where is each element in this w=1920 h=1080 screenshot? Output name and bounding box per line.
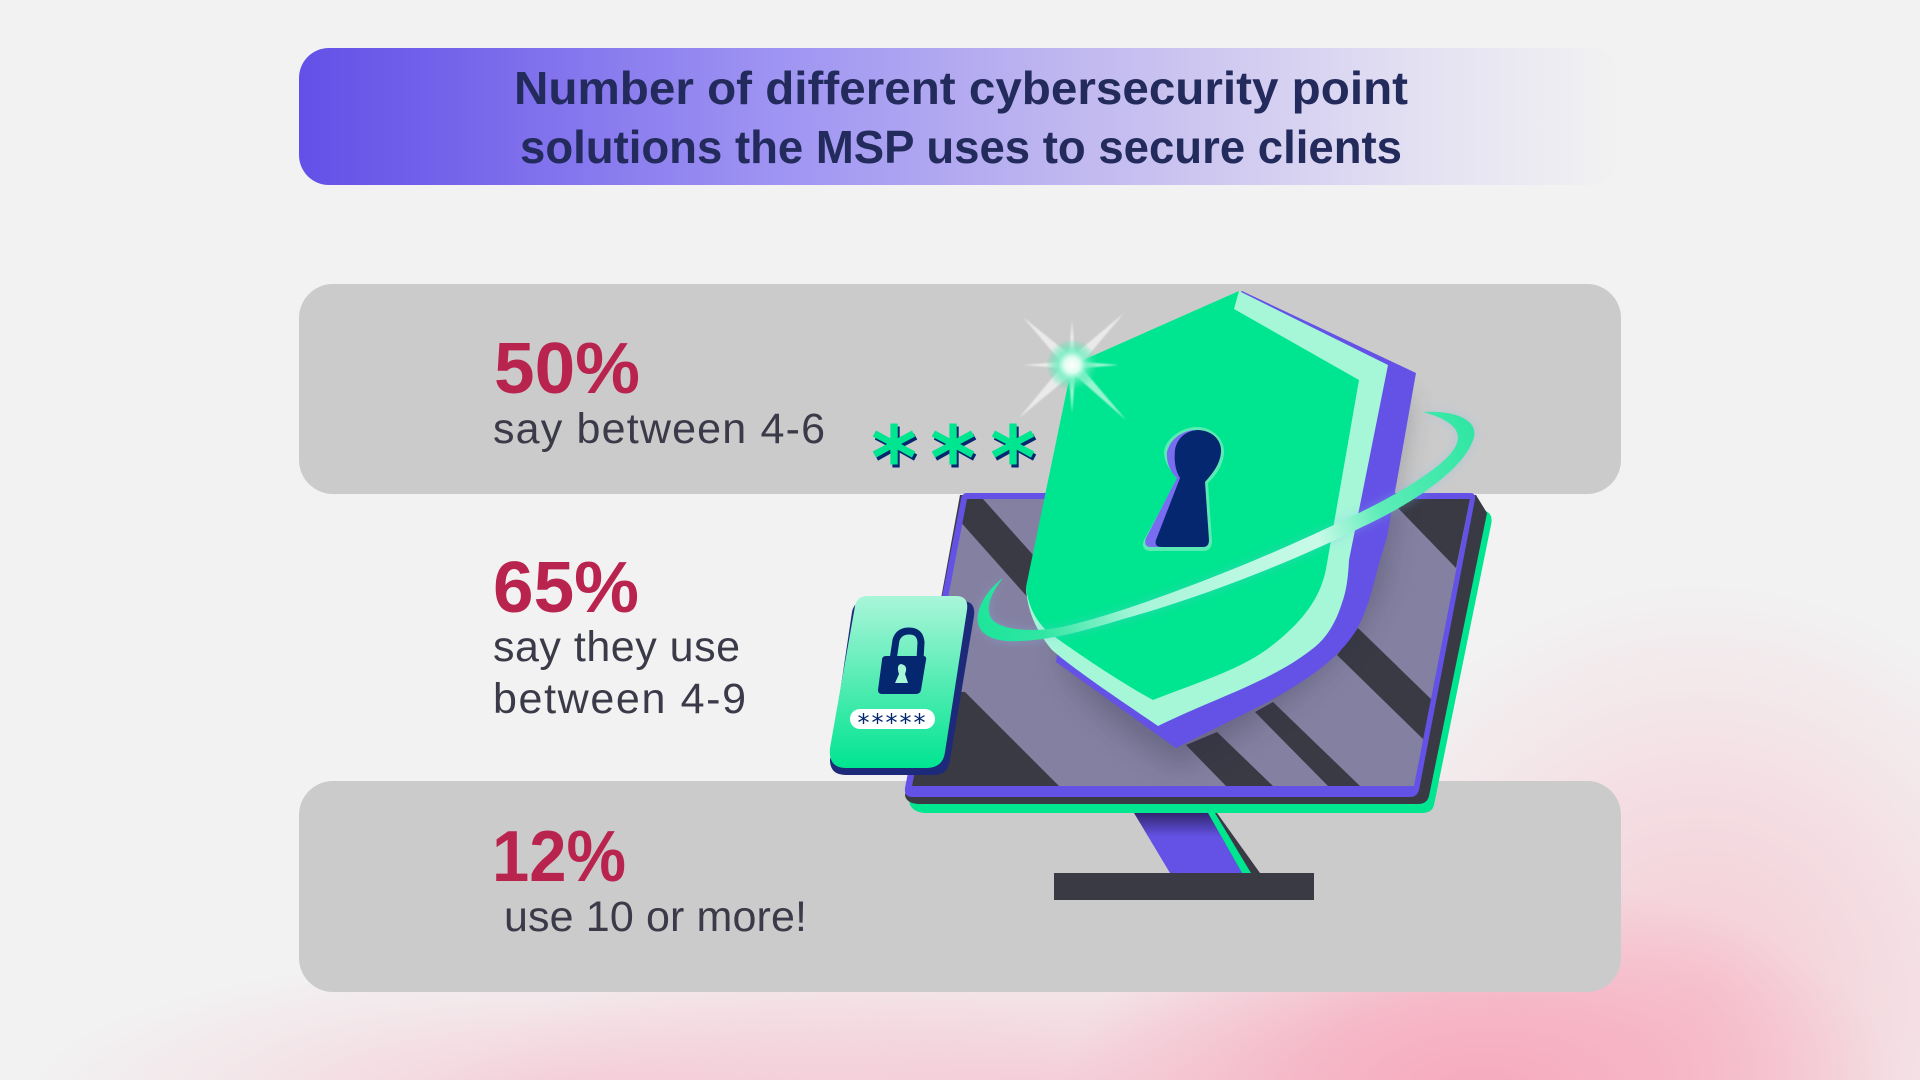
password field: *****: [858, 709, 928, 737]
icon: password asterisks: *: [871, 407, 917, 510]
stat: 65% say they use between 4-9: between 4-9: [493, 675, 746, 723]
stat: 50% say between 4-6: 50%: [494, 329, 640, 409]
panel: bottom grey band: [299, 781, 1621, 992]
infographic canvas: [299, 48, 1621, 992]
shield shadow: [1060, 340, 1410, 768]
icon: sparkle: [1019, 313, 1126, 420]
stat: 65% say they use between 4-9: say they use: [493, 623, 740, 671]
icon: password asterisks: *: [932, 410, 978, 513]
padlock: [878, 631, 926, 694]
stat: 65% say they use between 4-9: 65%: [493, 548, 639, 628]
panel: top grey band: [299, 284, 1621, 494]
monitor screen with diagonal stripes: [905, 499, 1470, 786]
icon: phone with lock: [830, 596, 974, 775]
icon: password asterisks: *: [930, 407, 976, 510]
stat: 50% say between 4-6: [493, 329, 825, 453]
title text: Number of different cybersecurity point: [514, 62, 1408, 114]
icon: password asterisks: *: [992, 410, 1038, 513]
icon: password asterisks: *: [873, 410, 919, 513]
shield green face: [1026, 291, 1359, 700]
monitor stand: [1054, 813, 1314, 900]
stat: 50% say between 4-6: say between 4-6: [493, 405, 825, 453]
icon: monitor: [905, 493, 1492, 900]
shield purple side: [1056, 291, 1416, 748]
icon: shield: [1026, 291, 1416, 748]
shield light rim: [1026, 291, 1388, 726]
icon: password asterisks: *: [990, 407, 1036, 510]
keyhole: [1143, 427, 1224, 551]
icon: password asterisks: [871, 407, 1038, 513]
monitor frame: [905, 493, 1492, 813]
icon: orbit swoosh: [978, 412, 1474, 641]
title banner: solutions the MSP uses to secure clients: [520, 121, 1402, 173]
stat: 12% use 10 or more: 12%: [492, 817, 626, 897]
title banner: [299, 48, 1621, 185]
stat: 12% use 10 or more: [492, 817, 807, 941]
stat: 12% use 10 or more: use 10 or more!: [504, 893, 807, 941]
stat: 65% say they use between 4-9: [493, 548, 746, 723]
